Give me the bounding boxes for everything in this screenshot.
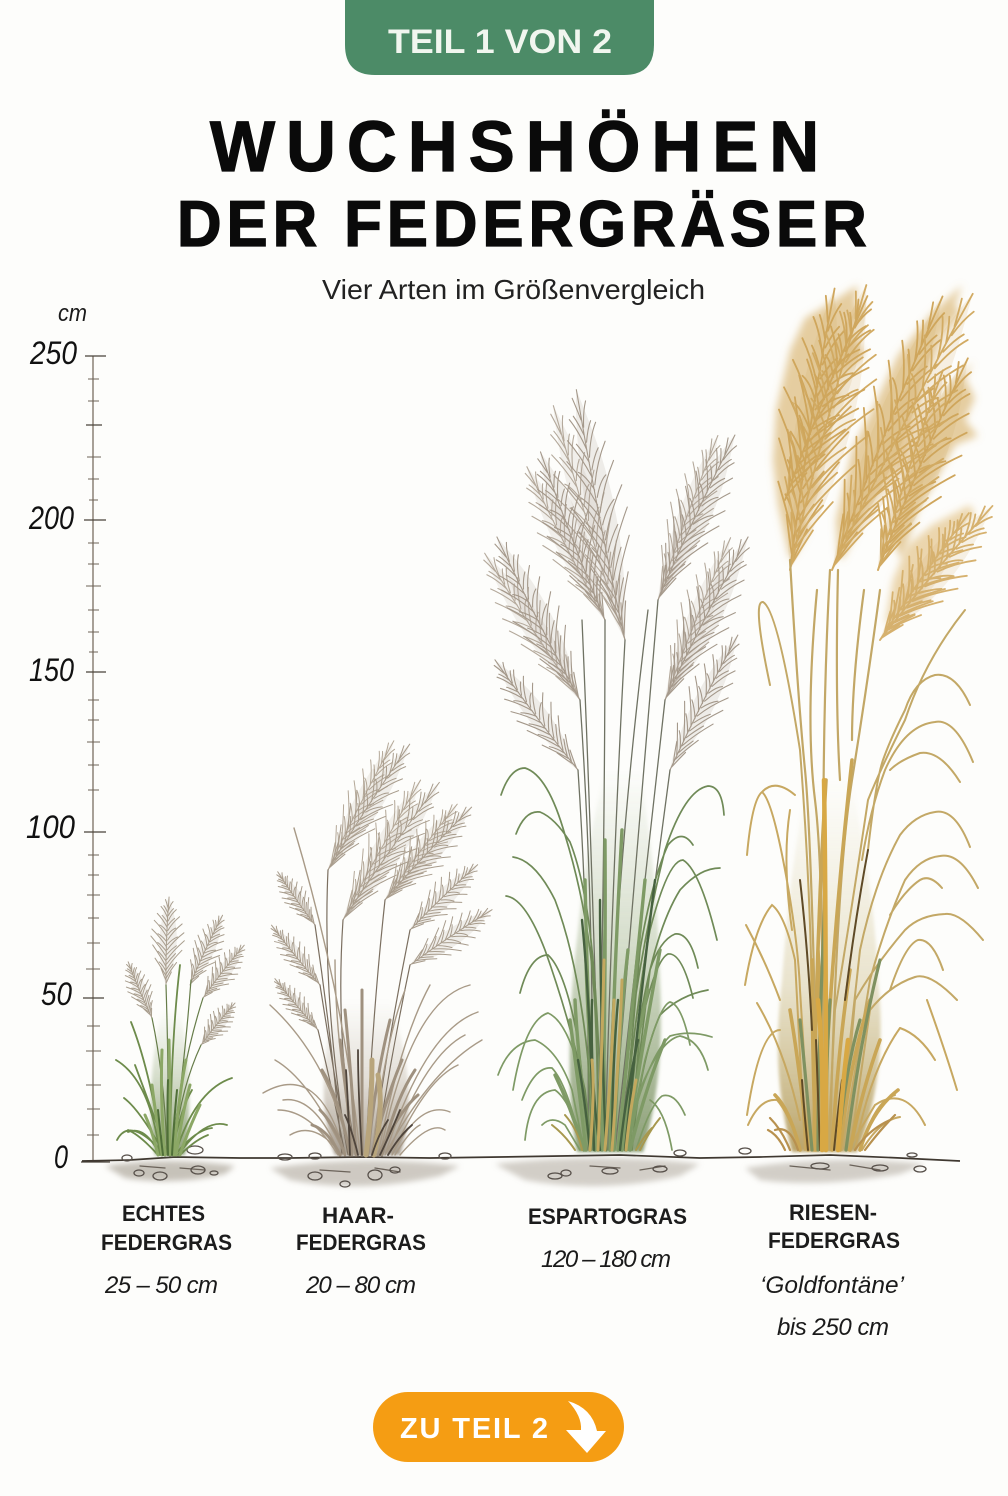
label: Riesen-Federgras: bis 250 cm (777, 1314, 889, 1341)
ground with soil (82, 1146, 960, 1187)
plant: Haar-Federgras (262, 733, 501, 1155)
label: Espartogras: ESPARTOGRAS (528, 1204, 687, 1229)
label: Haar-Federgras: FEDERGRAS (296, 1230, 426, 1255)
height axis: 200 (28, 500, 74, 536)
label: Riesen-Federgras: RIESEN- (789, 1200, 877, 1225)
button: Zu Teil 2: ZU TEIL 2 (400, 1413, 548, 1445)
height axis: cm (58, 300, 87, 327)
label: Echtes Federgras: FEDERGRAS (101, 1230, 232, 1255)
label: Riesen-Federgras: ‘Goldfontäne’ (760, 1272, 905, 1299)
height axis (26, 300, 110, 1175)
plant: Espartogras (467, 384, 769, 1152)
title (177, 107, 867, 260)
height axis: 100 (26, 809, 75, 845)
badge: Teil 1 von 2 (345, 0, 654, 75)
button: Zu Teil 2 (373, 1392, 624, 1462)
title: DER FEDERGRÄSER (177, 189, 867, 260)
label: Echtes Federgras: 25 – 50 cm (104, 1272, 218, 1299)
height axis: 50 (41, 976, 72, 1012)
label: Echtes Federgras: ECHTES (122, 1201, 205, 1226)
label: Espartogras (528, 1204, 687, 1273)
height axis: 150 (29, 652, 74, 688)
label: Haar-Federgras: 20 – 80 cm (305, 1272, 416, 1299)
label: Espartogras: 120 – 180 cm (541, 1246, 671, 1273)
subtitle: Vier Arten im Größenvergleich (322, 274, 705, 305)
title: WUCHSHÖHEN (210, 107, 819, 186)
label: Haar-Federgras (296, 1203, 426, 1299)
plant: Echtes Federgras (116, 896, 255, 1155)
icon: curved down arrow (566, 1401, 606, 1453)
plant: Riesen-Federgras Goldfontäne (745, 274, 1008, 1152)
label: Riesen-Federgras (760, 1200, 905, 1341)
label: Echtes Federgras (101, 1201, 232, 1299)
badge: Teil 1 von 2: TEIL 1 VON 2 (388, 23, 612, 61)
label: Riesen-Federgras: FEDERGRAS (768, 1228, 900, 1253)
height axis: 0 (54, 1139, 68, 1175)
height axis: 250 (29, 335, 77, 371)
label: Haar-Federgras: HAAR- (322, 1203, 394, 1228)
